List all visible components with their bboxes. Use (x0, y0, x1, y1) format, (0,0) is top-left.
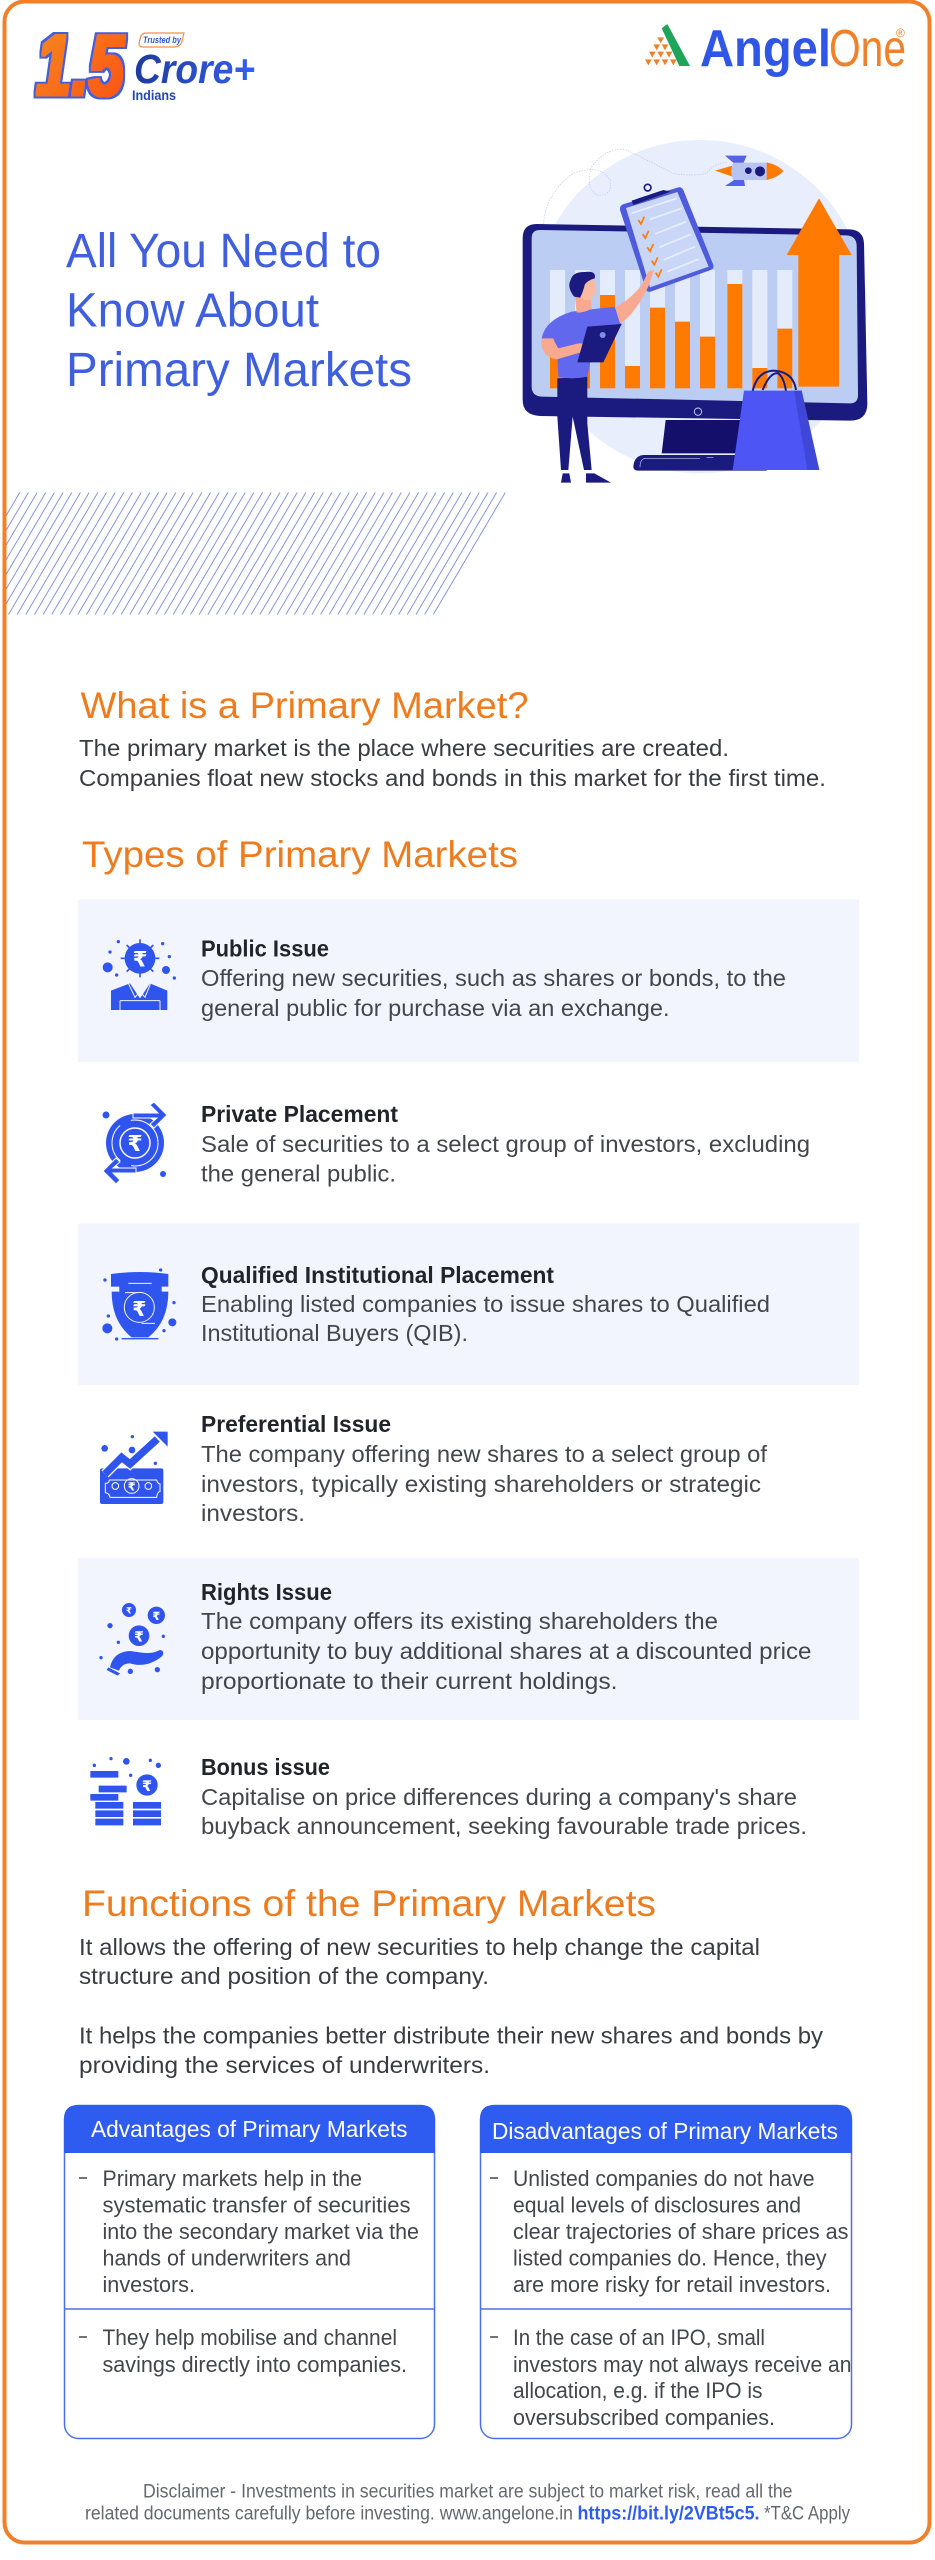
panel: disadvantages (480, 2105, 852, 2438)
text: functions: structure and position of the company. (79, 1963, 489, 1989)
list item: disadvantage 1: clear trajectories of share prices as (513, 2219, 848, 2244)
header: disadvantages (480, 2105, 852, 2153)
text: bonus issue: buyback announcement, seeking favourable trade prices. (201, 1813, 807, 1839)
text: primary market definition: The primary market is the place where securities are created. (79, 735, 729, 761)
list item: disadvantage 1: listed companies do. Hence, they (513, 2246, 826, 2271)
arrow: growth (787, 198, 852, 387)
panel: qualified institutional placement (78, 1224, 859, 1385)
text: public issue (201, 936, 786, 1021)
text: private placement: the general public. (201, 1160, 396, 1186)
badge: trusted by 1.5 crore+ indians: 1.5 (36, 18, 125, 114)
panel: bonus issue (90, 1754, 807, 1839)
list item: advantage 1 (79, 2166, 419, 2297)
list item: disadvantage 1: Unlisted companies do not have (513, 2166, 814, 2191)
icon: hand with coins: ₹ (126, 1607, 132, 1617)
text: functions: providing the services of underwriters. (79, 2052, 490, 2078)
icon: monitor (523, 224, 867, 471)
icon: shield (102, 1268, 176, 1341)
disclaimer (85, 2482, 850, 2524)
text: preferential issue: investors, typically existing shareholders or strategic (201, 1471, 761, 1497)
icon: hand with coins: ₹ (152, 1609, 160, 1623)
text: public issue: Offering new securities, such as shares or bonds, to the (201, 965, 786, 991)
text: qualified institutional placement: Qualified Institutional Placement (201, 1262, 554, 1288)
icon: public issue: ₹ (133, 947, 147, 972)
list item: advantage 2: They help mobilise and channel (102, 2325, 397, 2350)
list item: advantage 1: Primary markets help in the (102, 2166, 362, 2191)
list item: advantage 1: systematic transfer of securities (102, 2193, 410, 2218)
list item: advantage 2: savings directly into companies. (102, 2352, 407, 2377)
icon: private placement: ₹ (127, 1132, 143, 1157)
title: Primary Markets (66, 344, 412, 397)
panel: rights issue (78, 1558, 859, 1720)
icon: banknote with rising arrow: ₹ (128, 1480, 136, 1494)
icon: clipboard (620, 184, 714, 292)
list item: disadvantage 1: equal levels of disclosures and (513, 2193, 801, 2218)
icon: public issue (103, 939, 176, 1010)
text: functions (79, 1934, 823, 2078)
text: rights issue: proportionate to their current holdings. (201, 1668, 618, 1694)
disclaimer: related documents carefully before investing. www.angelone.in (85, 2504, 573, 2524)
badge: trusted by 1.5 crore+ indians (36, 18, 255, 114)
text: public issue: general public for purchase via an exchange. (201, 995, 670, 1021)
text: preferential issue: The company offering new shares to a select group of (201, 1441, 767, 1467)
text: rights issue: opportunity to buy additional shares at a discounted price (201, 1638, 812, 1664)
text: qualified institutional placement (201, 1262, 770, 1346)
icon: shield: ₹ (132, 1297, 147, 1321)
header: disadvantages: Disadvantages of Primary Markets (492, 2118, 838, 2144)
list item: advantage 2 (79, 2325, 407, 2377)
list item: disadvantage 1: are more risky for retail investors. (513, 2272, 831, 2297)
text: rights issue (201, 1579, 812, 1694)
text: rights issue: The company offers its existing shareholders the (201, 1608, 718, 1634)
text: primary market definition: Companies float new stocks and bonds in this market for the first time. (79, 765, 826, 791)
text: private placement: Sale of securities to a select group of investors, excluding (201, 1131, 810, 1157)
panel: advantages (64, 2105, 435, 2438)
text: bonus issue (201, 1754, 807, 1839)
text: public issue: Public Issue (201, 936, 329, 962)
decorative stripes (0, 492, 505, 614)
icon: coin stacks (90, 1757, 161, 1825)
logo: Angel One: ® (896, 26, 905, 40)
list item: disadvantage 2: investors may not always receive an (513, 2352, 852, 2377)
icon: hand with coins (99, 1603, 165, 1676)
heading: types of primary markets: Types of Primary Markets (82, 834, 518, 875)
panel: public issue (78, 900, 859, 1062)
icon: coin stacks: ₹ (142, 1778, 152, 1795)
badge: trusted by 1.5 crore+ indians: Trusted by (143, 35, 182, 46)
bar chart (550, 270, 792, 388)
logo: Angel One: One (829, 20, 906, 78)
text: bonus issue: Capitalise on price differences during a company's share (201, 1784, 797, 1810)
icon: private placement (102, 1102, 167, 1184)
logo: Angel One (645, 20, 906, 78)
person (542, 270, 654, 483)
disclaimer: Disclaimer - Investments in securities market are subject to market risk, read all the (143, 2482, 792, 2502)
text: qualified institutional placement: Enabling listed companies to issue shares to Qualified (201, 1291, 770, 1317)
icon: shopping bag (733, 371, 819, 470)
illustration: analyst with chart monitor (523, 140, 867, 483)
list item: disadvantage 2 (490, 2325, 852, 2430)
icon: banknote with rising arrow (100, 1432, 168, 1504)
badge: trusted by 1.5 crore+ indians: Crore+ (134, 46, 255, 92)
title: All You Need to (66, 225, 381, 278)
list item: advantage 1: investors. (102, 2272, 195, 2297)
title (66, 225, 412, 397)
logo: Angel One: Angel (700, 20, 831, 78)
text: preferential issue: Preferential Issue (201, 1411, 391, 1437)
text: rights issue: Rights Issue (201, 1579, 332, 1605)
icon: hand with coins: ₹ (134, 1630, 144, 1646)
badge: trusted by 1.5 crore+ indians: Indians (132, 88, 176, 103)
text: functions: It helps the companies better distribute their new shares and bonds by (79, 2022, 823, 2048)
text: qualified institutional placement: Institutional Buyers (QIB). (201, 1320, 468, 1346)
list item: disadvantage 2: In the case of an IPO, small (513, 2325, 765, 2350)
title: Know About (66, 284, 319, 338)
disclaimer: *T&C Apply (764, 2504, 850, 2524)
list item: disadvantage 2: allocation, e.g. if the IPO is (513, 2378, 762, 2403)
text: preferential issue: investors. (201, 1500, 305, 1526)
text: bonus issue: Bonus issue (201, 1754, 330, 1780)
disclaimer: https://bit.ly/2VBt5c5. (578, 2504, 760, 2524)
heading: functions of the primary markets: Functions of the Primary Markets (82, 1883, 656, 1924)
panel: preferential issue (100, 1411, 767, 1526)
header: advantages (64, 2105, 435, 2153)
text: preferential issue (201, 1411, 767, 1526)
text: private placement (201, 1101, 810, 1186)
list item: advantage 1: hands of underwriters and (102, 2246, 351, 2271)
icon: rocket (715, 156, 783, 186)
list item: advantage 1: into the secondary market via the (102, 2219, 419, 2244)
panel: private placement (102, 1101, 810, 1186)
text: functions: It allows the offering of new securities to help change the capital (79, 1934, 760, 1960)
header: advantages: Advantages of Primary Markets (91, 2116, 408, 2142)
heading: what is a primary market: What is a Primary Market? (80, 685, 528, 726)
text: primary market definition (79, 735, 826, 791)
list item: disadvantage 1 (490, 2166, 848, 2297)
list item: disadvantage 2: oversubscribed companies. (513, 2405, 775, 2430)
text: private placement: Private Placement (201, 1101, 398, 1127)
